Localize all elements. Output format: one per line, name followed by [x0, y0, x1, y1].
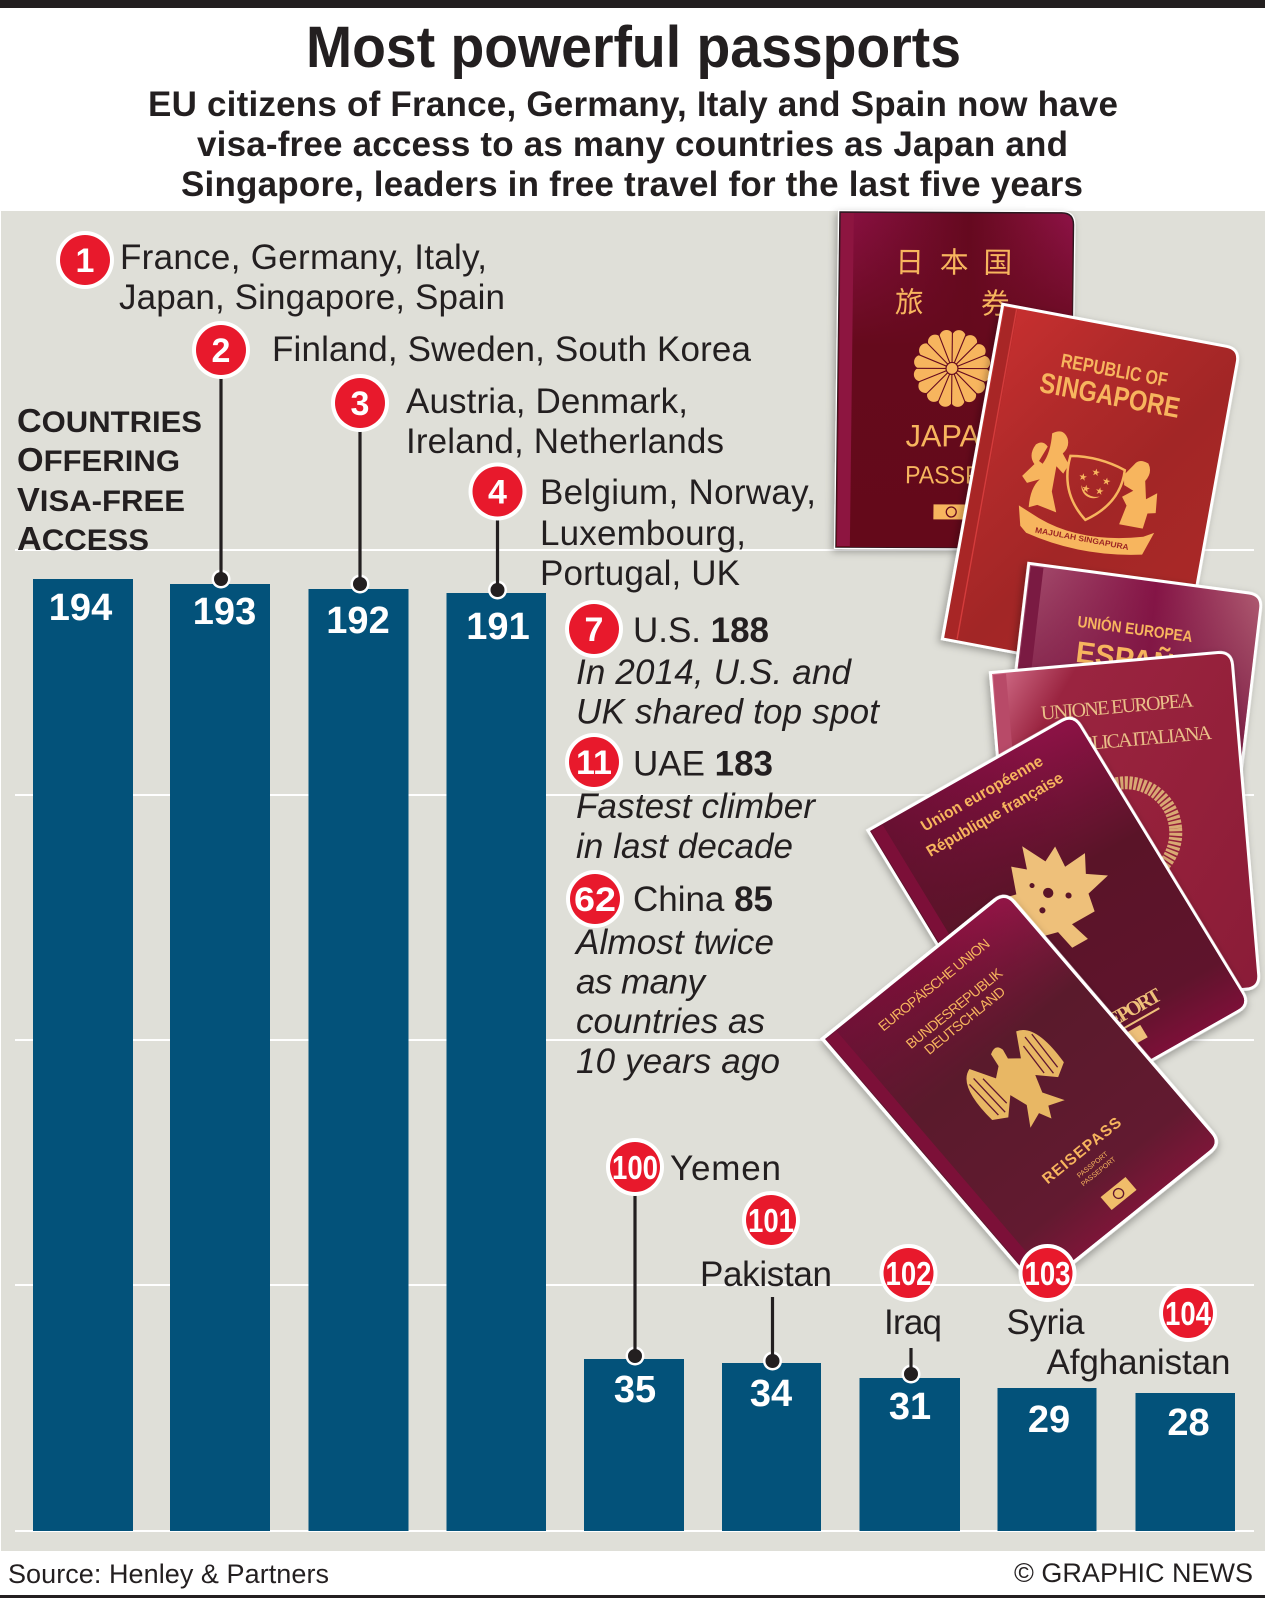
- source: Source: Henley & Partners: [8, 1559, 329, 1589]
- title: Most powerful passports: [306, 15, 961, 80]
- passport: Italy: UNIONE EUROPEA: [1040, 689, 1195, 725]
- passport: Singapore: ★: [1077, 472, 1088, 484]
- subtitle: visa-free access to as many countries as Japan and: [197, 125, 1068, 164]
- note: U.S.: [576, 611, 880, 732]
- leader line rank 100: [626, 1195, 644, 1366]
- passport: Singapore: [944, 306, 1238, 682]
- bar: rank 3, 192: [308, 589, 408, 1531]
- rank badge 100: [606, 1138, 664, 1196]
- passport: Japan: 旅: [895, 287, 924, 319]
- label: rank 3 countries: Ireland, Netherlands: [406, 422, 724, 461]
- passport: Italy: REPUBBLICA ITALIANA: [1026, 722, 1213, 760]
- label: Syria: Syria: [1006, 1303, 1085, 1342]
- bar: rank 4, 191: [446, 593, 546, 1531]
- rank badge 102: 102: [886, 1255, 932, 1292]
- label: rank 3 countries: [406, 382, 724, 461]
- rank badge 3: [331, 374, 389, 432]
- passport: France: République française: [923, 770, 1067, 860]
- passport: Germany: REISEPASS: [1039, 1114, 1125, 1188]
- bar: rank 102, 31: [860, 1378, 960, 1531]
- label: Afghanistan: Afghanistan: [1046, 1343, 1230, 1382]
- axis heading: countries offering visa-free access: [17, 402, 202, 557]
- rank badge 7: [565, 600, 623, 658]
- note: China: 10 years ago: [576, 1042, 780, 1081]
- bar value labels: 34: [750, 1373, 792, 1415]
- bar: rank 103, 29: [998, 1388, 1096, 1531]
- axis heading: countries offering visa-free access: ACCESS: [17, 520, 149, 557]
- bar: rank 2, 193: [170, 584, 270, 1531]
- bar chart: [33, 579, 1235, 1531]
- label: rank 4 countries: Belgium, Norway,: [540, 473, 816, 512]
- rank badge 11: 11: [576, 744, 612, 782]
- rank badge 4: 4: [488, 474, 507, 512]
- passport: Japan: 本: [940, 247, 969, 280]
- label: rank 1 countries: France, Germany, Italy,: [120, 238, 487, 277]
- note: UAE: Fastest climber: [576, 787, 816, 826]
- passport: Italy: [992, 653, 1258, 1008]
- note: China: countries as: [576, 1002, 765, 1041]
- note: China: [574, 880, 780, 1081]
- label: Iraq: Iraq: [884, 1303, 942, 1342]
- bar value labels: 29: [1028, 1399, 1070, 1441]
- rank badge 101: [742, 1191, 800, 1249]
- credit: © GRAPHIC NEWS: [1014, 1558, 1253, 1588]
- passport: Japan: 券: [981, 288, 1010, 321]
- note: China: China 85: [633, 880, 773, 919]
- chart panel background: [1, 211, 1265, 551]
- rank badge 1: [56, 231, 114, 289]
- passport: Singapore: REPUBLIC OF: [1059, 350, 1169, 392]
- rank badge 103: 103: [1024, 1255, 1070, 1292]
- label: rank 3 countries: Austria, Denmark,: [406, 382, 688, 421]
- passport: Singapore: ★: [1080, 483, 1091, 496]
- rank badge 2: 2: [212, 332, 230, 370]
- bar value labels: 35: [614, 1369, 656, 1411]
- chart panel background lower: [1, 551, 1265, 1551]
- axis heading: countries offering visa-free access: VISA-FREE: [17, 481, 185, 518]
- passport: Germany: DEUTSCHLAND: [921, 983, 1008, 1057]
- label: Pakistan: Pakistan: [700, 1255, 832, 1294]
- passport: Japan: PASSPORT: [905, 461, 1029, 490]
- rank badge 104: [1159, 1284, 1217, 1342]
- bar: rank 104, 28: [1136, 1393, 1235, 1531]
- leader line rank 101: [763, 1297, 782, 1370]
- leader line rank 3: [350, 430, 370, 594]
- bar value labels: 28: [1167, 1402, 1210, 1444]
- passport: Germany: BUNDESREPUBLIK: [903, 964, 1006, 1052]
- passport: Spain: [990, 565, 1261, 933]
- note: U.S.: UK shared top spot: [576, 692, 880, 732]
- axis heading: countries offering visa-free access: COUNTRIES: [17, 402, 202, 439]
- bar value labels: 192: [326, 600, 390, 642]
- rank badge 101: 101: [748, 1202, 794, 1239]
- note: China: Almost twice: [574, 923, 774, 962]
- label: rank 4 countries: Portugal, UK: [540, 554, 740, 593]
- bar value labels: [49, 587, 1210, 1444]
- passport: Germany: EUROPÄISCHE UNION: [875, 935, 993, 1034]
- rank badge 103: [1018, 1244, 1076, 1302]
- bar value labels: 193: [193, 591, 256, 633]
- passport: Singapore: MAJULAH SINGAPURA: [1034, 526, 1130, 552]
- rank badge 104: 104: [1165, 1295, 1212, 1332]
- bar: rank 101, 34: [722, 1363, 821, 1531]
- bottom black band: [0, 1595, 1265, 1598]
- note: U.S.: U.S. 188: [633, 611, 769, 650]
- note: China: as many: [576, 962, 708, 1002]
- top black band: [0, 0, 1265, 8]
- passport: Singapore: SINGAPORE: [1037, 367, 1182, 425]
- passport: Spain: ESPAÑA: [1074, 635, 1197, 685]
- passport: Spain: UNIÓN EUROPEA: [1077, 612, 1194, 646]
- passport: France: Union européenne: [918, 753, 1047, 835]
- subtitle: Singapore, leaders in free travel for the last five years: [181, 165, 1083, 204]
- note: U.S.: In 2014, U.S. and: [576, 653, 853, 692]
- passport: Singapore: ★: [1094, 486, 1105, 498]
- passport: Japan: [836, 212, 1074, 548]
- passport: Japan: JAPAN: [905, 418, 1002, 454]
- bar: rank 100, 35: [584, 1359, 684, 1531]
- rank badge 62: [566, 870, 624, 928]
- leader line rank 2: [212, 376, 230, 588]
- passport: France: [870, 716, 1248, 1119]
- rank badge 102: [880, 1244, 938, 1302]
- axis heading: countries offering visa-free access: OFFERING: [17, 441, 180, 478]
- passport: Germany: [825, 894, 1219, 1288]
- rank badge 4: [468, 462, 526, 520]
- rank badge 7: 7: [585, 611, 603, 649]
- rank badge 1: 1: [76, 242, 94, 280]
- note: UAE: [576, 744, 816, 866]
- label: rank 4 countries: Luxembourg,: [540, 514, 746, 553]
- rank badge 62: 62: [574, 881, 616, 919]
- passport: Japan: 国: [983, 247, 1012, 280]
- passport: Singapore: ★: [1090, 467, 1101, 479]
- passport: Germany: PASSEPORT: [1080, 1156, 1118, 1188]
- passport: Japan: 日: [895, 247, 924, 279]
- label: rank 4 countries: [540, 473, 816, 593]
- passport: Germany: PASSPORT: [1076, 1150, 1110, 1180]
- label: rank 1 countries: [119, 238, 505, 317]
- subtitle: EU citizens of France, Germany, Italy and Spain now have: [148, 85, 1118, 124]
- passport: Singapore: ★: [1101, 476, 1112, 488]
- bar: rank 1, 194: [33, 579, 133, 1531]
- label: rank 2 countries: Finland, Sweden, South Korea: [272, 330, 752, 369]
- bar value labels: 194: [49, 587, 112, 629]
- leader line rank 102: [902, 1348, 920, 1384]
- note: UAE: in last decade: [576, 827, 793, 866]
- label: rank 1 countries: Japan, Singapore, Spain: [119, 278, 505, 317]
- label: Yemen: Yemen: [670, 1149, 781, 1188]
- note: UAE: UAE 183: [633, 744, 773, 784]
- bar value labels: 31: [889, 1386, 931, 1428]
- subtitle: [148, 85, 1118, 204]
- rank badge 11: [565, 733, 623, 791]
- passport: France: PASSEPORT: [1071, 984, 1166, 1051]
- rank badge 3: 3: [351, 385, 369, 423]
- rank badge 2: [192, 321, 250, 379]
- leader line rank 4: [488, 518, 507, 600]
- bar value labels: 191: [466, 606, 530, 648]
- rank badge 100: 100: [612, 1149, 658, 1186]
